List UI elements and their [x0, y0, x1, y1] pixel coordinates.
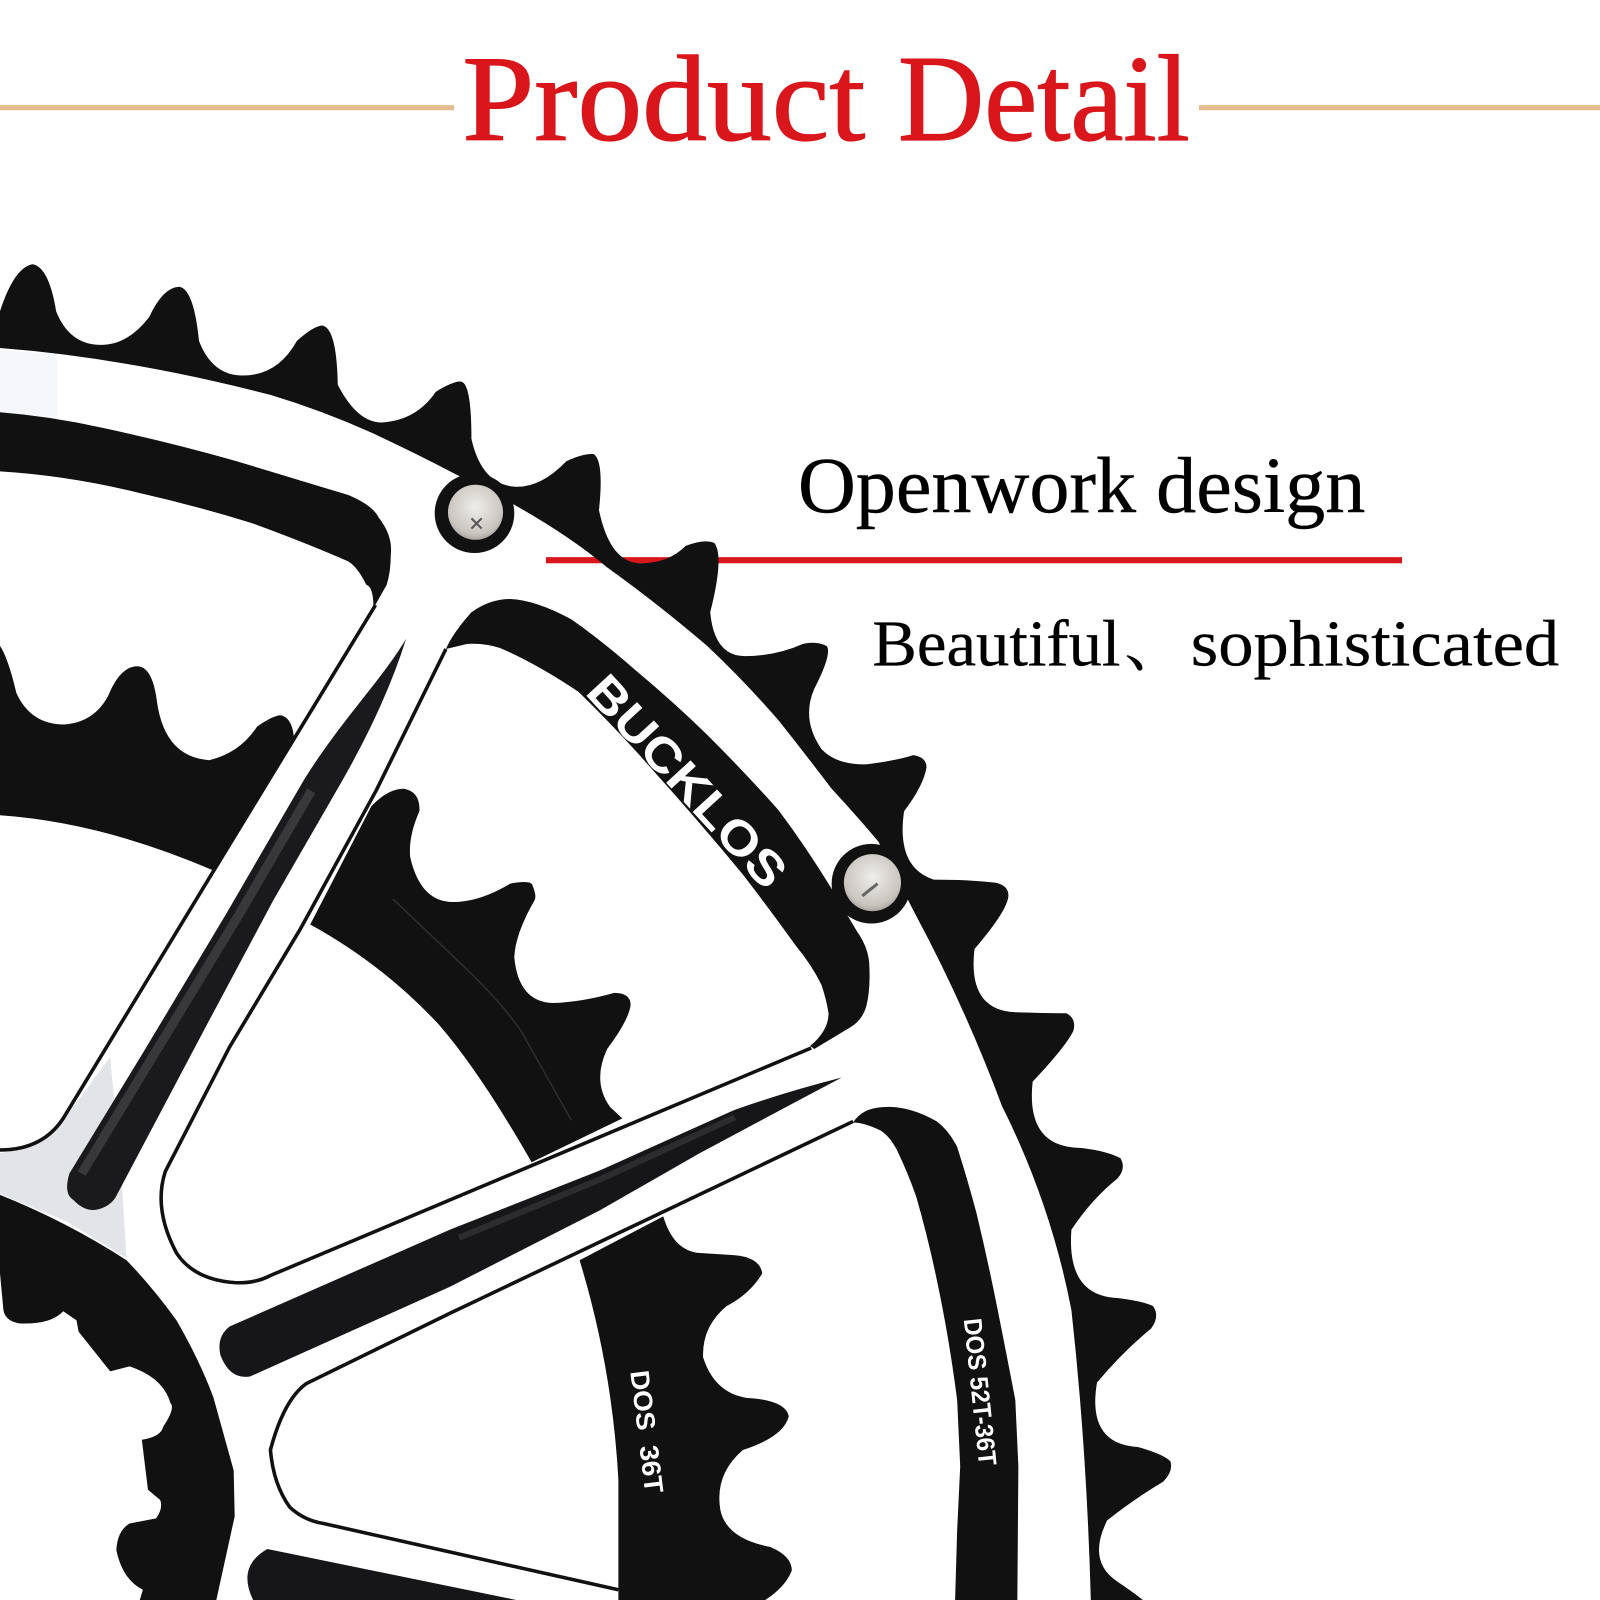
lower window band [853, 1107, 1018, 1600]
title [462, 32, 1190, 167]
feature description: sophisticated [1191, 608, 1559, 680]
middle window band [446, 599, 870, 1049]
middle window outline [161, 649, 811, 1283]
inner gear segment upper left [0, 646, 294, 870]
title rule left [0, 105, 454, 110]
feature description [872, 608, 1559, 680]
spoke spike middle [219, 1078, 842, 1377]
bolt upper [435, 473, 514, 553]
feature description: 、 [1124, 611, 1186, 679]
inner gear segment lower [580, 1216, 792, 1600]
inner gear segment middle [310, 789, 631, 1162]
feature underline [546, 557, 1402, 563]
title: Product [462, 32, 865, 167]
teeth marking 36T: DOS 36T [624, 1369, 669, 1495]
upper window outline [0, 605, 376, 1150]
title: Detail [898, 32, 1190, 167]
spoke spike upper [67, 639, 406, 1210]
bolt lower [832, 844, 911, 923]
teeth marking 52T-36T: DOS 52T-36T [958, 1317, 1001, 1467]
feature heading: Openwork design [798, 442, 1365, 530]
spoke spike bottom [247, 1549, 516, 1600]
outer chainring teeth [0, 264, 1171, 1600]
upper window band [0, 412, 391, 608]
hub gear [0, 1195, 235, 1600]
feature description: Beautiful [872, 608, 1120, 680]
lower window outline [270, 1121, 853, 1590]
light shading on spider [0, 350, 127, 1258]
brand logo: BUCKLOS [576, 665, 797, 899]
chainring illustration [0, 264, 1171, 1600]
title rule right [1199, 105, 1600, 110]
